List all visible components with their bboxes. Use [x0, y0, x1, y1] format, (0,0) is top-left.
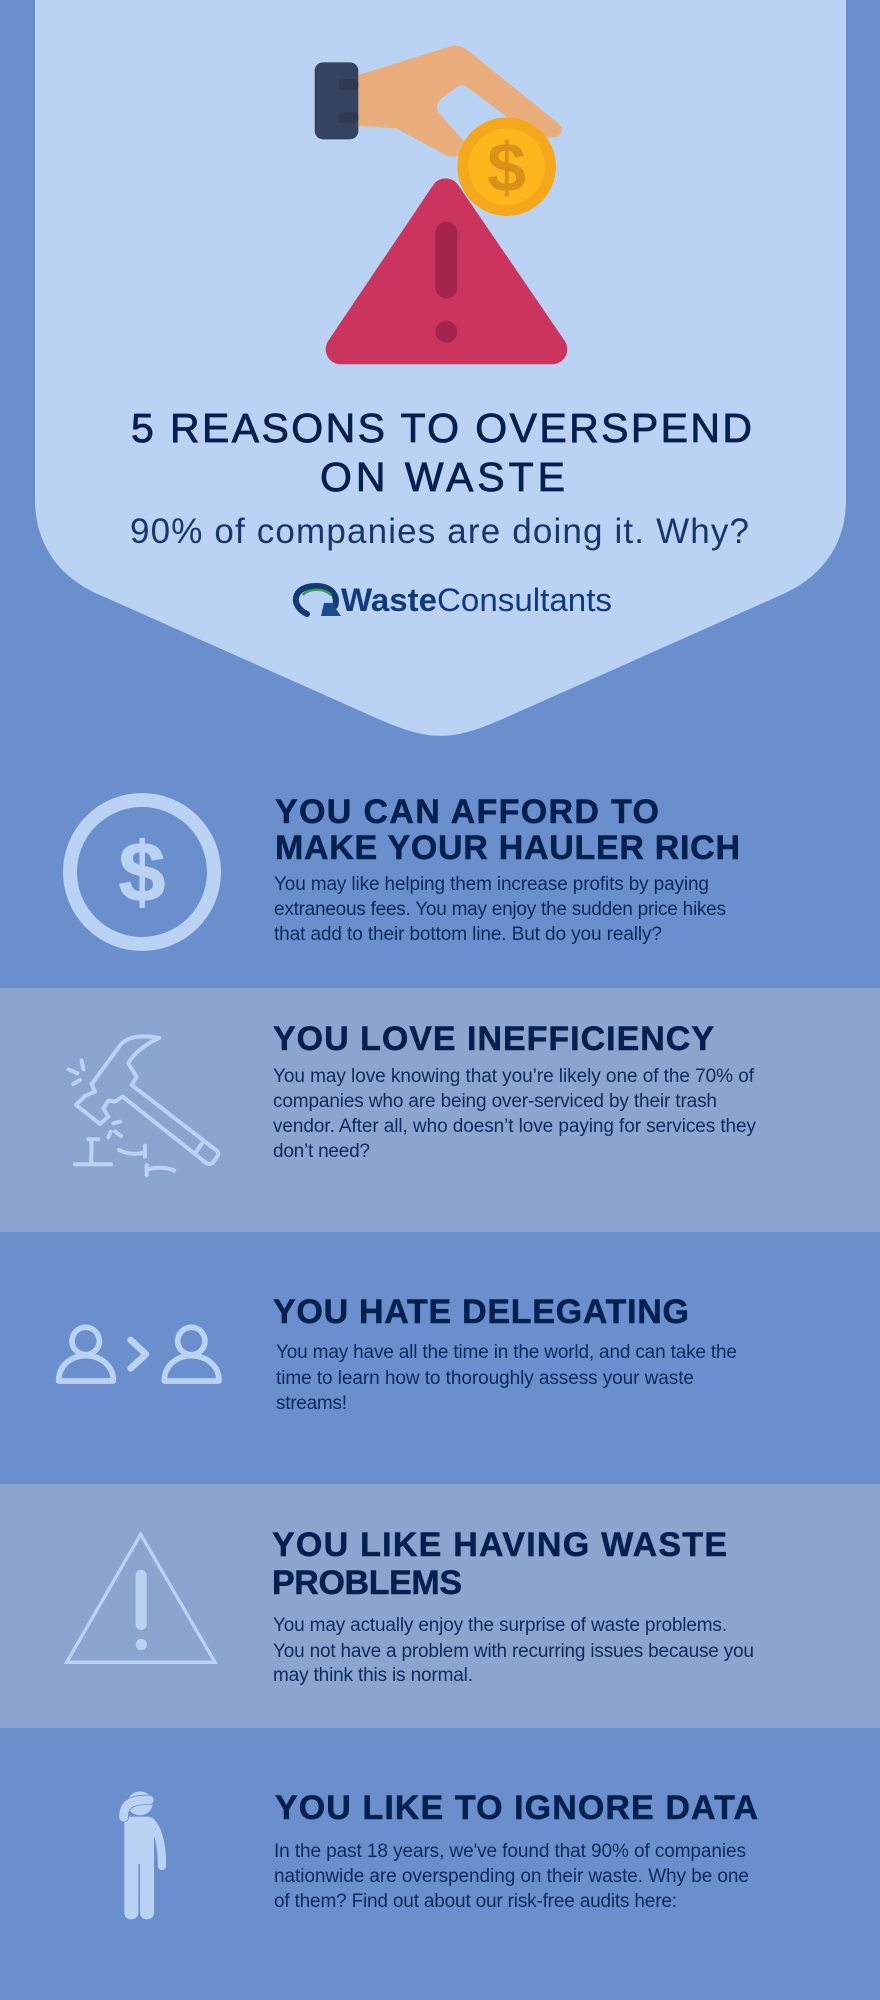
- heading: reason 1: MAKE YOUR HAULER RICH: [275, 829, 740, 867]
- icon: person greater than person: [59, 1327, 219, 1381]
- icon: hammer breaking nail: [68, 1036, 218, 1175]
- icon: hand dropping coin onto warning triangle: $: [487, 128, 526, 206]
- text: reason 3: [276, 1342, 737, 1414]
- text: reason 1: that add to their bottom line. But do you really?: [274, 924, 662, 945]
- text: reason 1: [274, 874, 726, 945]
- icon: dollar ring: $: [119, 825, 165, 919]
- exclamation mark: [435, 222, 457, 299]
- hand: [358, 46, 562, 157]
- heading: reason 5: YOU LIKE TO IGNORE DATA: [275, 1789, 758, 1827]
- icon: person shading eyes: [124, 1791, 162, 1919]
- text: reason 3: streams!: [276, 1393, 347, 1414]
- band: reason 4 background: [0, 1484, 880, 1728]
- cuff: [315, 62, 358, 139]
- heading: reason 3: YOU HATE DELEGATING: [273, 1293, 689, 1331]
- icon: outlined warning triangle: [67, 1534, 215, 1662]
- logo: Waste Consultants: [296, 582, 612, 618]
- text: reason 3: time to learn how to thoroughly assess your waste: [276, 1368, 694, 1389]
- logo: Waste Consultants: Consultants: [437, 582, 612, 618]
- warning triangle: [341, 193, 552, 349]
- heading: reason 2: YOU LOVE INEFFICIENCY: [273, 1020, 714, 1058]
- title: 5 REASONS TO OVERSPEND: [131, 405, 752, 451]
- text: reason 5: [274, 1841, 749, 1912]
- text: reason 4: You may actually enjoy the surprise of waste problems.: [273, 1615, 727, 1636]
- panel: header shield: [35, 0, 846, 736]
- text: reason 5: nationwide are overspending on their waste. Why be one: [274, 1866, 749, 1887]
- text: reason 5: In the past 18 years, we've found that 90% of companies: [274, 1841, 746, 1862]
- text: reason 1: extraneous fees. You may enjoy the sudden price hikes: [274, 899, 726, 920]
- heading: reason 4: PROBLEMS: [272, 1564, 462, 1602]
- gold coin: [457, 117, 556, 216]
- subtitle: 90% of companies are doing it. Why?: [130, 512, 749, 551]
- icon: dollar ring: [70, 800, 214, 944]
- band: reason 2 background: [0, 988, 880, 1232]
- text: reason 2: [273, 1066, 756, 1162]
- text: reason 2: companies who are being over-serviced by their trash: [273, 1091, 717, 1112]
- heading: reason 1: [275, 793, 740, 867]
- text: reason 4: [273, 1615, 754, 1686]
- text: reason 1: You may like helping them increase profits by paying: [274, 874, 709, 895]
- text: reason 2: You may love knowing that you’re likely one of the 70% of: [273, 1066, 755, 1087]
- text: reason 4: may think this is normal.: [273, 1665, 473, 1686]
- icon: hand dropping coin onto warning triangle: [315, 46, 562, 349]
- heading: reason 4: YOU LIKE HAVING WASTE: [272, 1526, 727, 1564]
- heading: reason 1: YOU CAN AFFORD TO: [275, 793, 659, 831]
- text: reason 5: of them? Find out about our risk-free audits here:: [274, 1891, 677, 1912]
- logo: Waste Consultants: Waste: [341, 582, 437, 618]
- text: reason 2: vendor. After all, who doesn’t love paying for services they: [273, 1116, 756, 1137]
- text: reason 4: You not have a problem with recurring issues because you: [273, 1641, 754, 1662]
- title: [131, 405, 752, 500]
- text: reason 2: don’t need?: [273, 1141, 370, 1162]
- heading: reason 4: [272, 1526, 727, 1602]
- text: reason 3: You may have all the time in the world, and can take the: [276, 1342, 737, 1363]
- title: ON WASTE: [320, 454, 565, 500]
